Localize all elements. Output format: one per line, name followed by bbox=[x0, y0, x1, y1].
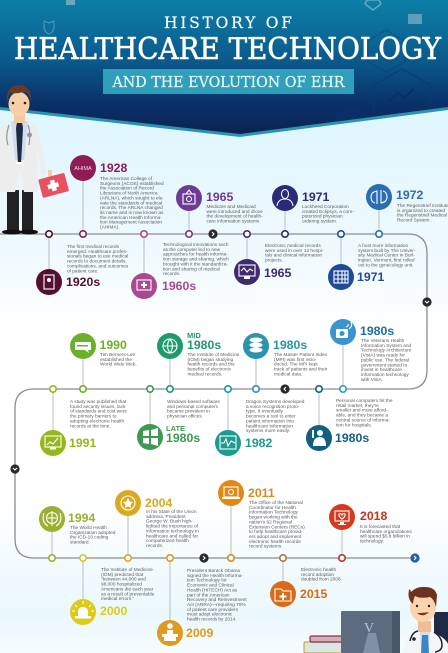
event: 2011: electronic health records bbox=[249, 539, 301, 545]
subtitle band bbox=[103, 69, 354, 94]
event: 2009: President Barack Obama bbox=[187, 568, 240, 574]
event: 2011: 2011 bbox=[248, 486, 275, 500]
event: 2000: medical errors." bbox=[101, 596, 134, 602]
event: late 1980s: became prevalent in bbox=[167, 409, 210, 415]
event: 2004: In his State of the Union bbox=[146, 509, 197, 515]
event: 1980s VistA: (VistA) was ready for bbox=[361, 353, 405, 359]
title: HISTORY OF bbox=[164, 14, 292, 32]
subtitle band: AND THE EVOLUTION OF EHR bbox=[112, 73, 345, 91]
event: 2000: The Institute of Medicine bbox=[101, 567, 153, 573]
event: 2009: of patient care providers bbox=[187, 607, 239, 613]
event: 1965 lower: projects. bbox=[265, 258, 283, 264]
event: 1982: 1982 bbox=[245, 436, 273, 450]
event: 2011: Coordinator for Health bbox=[249, 505, 296, 511]
event: 2004: 2004 bbox=[145, 496, 173, 510]
event: 2015: record adoption bbox=[301, 572, 334, 578]
event: 2009: Recovery and Reinvestment bbox=[187, 597, 247, 603]
event: 2004: George W. Bush high- bbox=[146, 519, 193, 525]
event: 1994: Organization adopted bbox=[70, 530, 116, 536]
event: 1971 lower: 1971 bbox=[357, 270, 385, 284]
doctor illustration bottom right bbox=[403, 587, 448, 653]
event: 2004: computerized health bbox=[146, 538, 189, 544]
event: 1980s master patient index: 1980s bbox=[273, 338, 307, 352]
event: 1928: The American College of bbox=[100, 176, 153, 182]
event: mid 1980s: 1980s bbox=[187, 338, 221, 352]
event: 1991: records at the time. bbox=[70, 423, 111, 429]
event: 1971 upper: 1971 bbox=[302, 190, 330, 204]
event: 1982: a voice recognition proto- bbox=[246, 404, 300, 410]
event: 1994: The World Health bbox=[70, 525, 107, 531]
event: 1928: (ARLNA), which sought to ele- bbox=[100, 195, 164, 201]
event: 1928: records. The ARLNA changed bbox=[100, 205, 163, 211]
event: late 1980s: 1980s bbox=[166, 431, 200, 445]
event: 1960s: Technological innovations such bbox=[163, 242, 229, 248]
event: 1971 lower: A host more information bbox=[358, 243, 409, 249]
event: mid 1980s: health records and the bbox=[188, 362, 235, 368]
event: 2009: part of the American bbox=[187, 592, 230, 598]
event: 1928: the American Health Informa- bbox=[100, 215, 162, 221]
event: 1982: systems more easily. bbox=[246, 428, 290, 434]
event: 1980s VistA: information technology bbox=[361, 372, 409, 378]
event: 1928: Librarians of North America bbox=[100, 191, 158, 197]
event: mid 1980s: MID bbox=[187, 331, 201, 340]
event: 1971 upper: ordering system. bbox=[302, 219, 337, 225]
event: 1920s: emerged. Healthcare profes- bbox=[67, 249, 128, 255]
event: 1971 upper: Lockheed Corporation bbox=[302, 204, 349, 210]
event: 1990 bbox=[70, 333, 137, 392]
event: 2011: nation's 62 Regional bbox=[249, 519, 292, 525]
event: late 1980s bbox=[137, 386, 220, 450]
event: 2011: The Office of the National bbox=[249, 500, 303, 506]
event: 1980s master patient index: track of patients and their bbox=[274, 367, 328, 373]
event: 2011: began working with the bbox=[249, 515, 298, 521]
event: 2009: Health (HITECH) Act as bbox=[187, 587, 238, 593]
computer monitor: V bbox=[364, 621, 374, 636]
event: 1990: established the bbox=[100, 357, 132, 363]
event: 1982: type. It eventually bbox=[246, 409, 284, 415]
event: 1971 lower: ington, Vermont, first rolled bbox=[358, 258, 415, 264]
event: 2011: ers adopt and implement bbox=[249, 534, 302, 540]
event: 1972 bbox=[366, 184, 448, 237]
event: 1994: 1994 bbox=[68, 511, 96, 525]
event: 2000: Americans die each year bbox=[101, 586, 154, 592]
event: 1972: the Regenstrief Medical bbox=[397, 213, 447, 219]
event: 1991: of standards and cost were bbox=[70, 409, 127, 415]
event: 1991: A study was published that bbox=[70, 399, 127, 405]
event: 1994 bbox=[39, 506, 116, 561]
event: 1965 upper: the development of health- bbox=[206, 214, 263, 220]
event: 2011: record systems. bbox=[249, 544, 283, 550]
event: 2015: 2015 bbox=[300, 587, 328, 601]
event: 1982 bbox=[215, 386, 305, 456]
event: 1960s: tion storage and sharing, which bbox=[163, 257, 229, 263]
event: 1991: adopting electronic health bbox=[70, 418, 124, 424]
event: 2004: information technology in bbox=[146, 528, 199, 534]
event: 1972: The Regenstrief Institute bbox=[397, 203, 448, 209]
event: mid 1980s: medical records. bbox=[188, 371, 222, 377]
doctor illustration left bbox=[0, 85, 52, 234]
event: 2000: "between 44,000 and bbox=[101, 577, 146, 583]
event: 1972: is organized to created bbox=[397, 208, 445, 214]
event: 2000: as a result of preventable bbox=[101, 591, 155, 597]
event: 2018: healthcare organizations bbox=[360, 529, 412, 535]
event: 2000: (IOM) predicted that bbox=[101, 572, 144, 578]
event: 1980s VistA bbox=[330, 319, 412, 392]
event: mid 1980s: benefits of electronic bbox=[188, 367, 232, 373]
event: 1928: 1928 bbox=[100, 161, 128, 175]
event: 1920s bbox=[36, 231, 129, 295]
event: 2004: healthcare and called for bbox=[146, 533, 198, 539]
event: 1960s: as the computer led to new bbox=[163, 247, 221, 253]
event: 1991 bbox=[40, 386, 127, 456]
event: 1928: (AHIMA). bbox=[100, 224, 120, 230]
event: 1928 bbox=[70, 155, 164, 237]
event: 2004 bbox=[115, 490, 199, 561]
event: 2004: lighted the importance of bbox=[146, 524, 199, 530]
event: 1965 upper: care information systems bbox=[206, 219, 260, 225]
event: 2018 bbox=[329, 504, 412, 561]
event: 1928: vate the standards of medical bbox=[100, 200, 162, 206]
event: 1972: 1972 bbox=[396, 188, 424, 202]
event: 1928: its name and is now known as bbox=[100, 210, 164, 216]
event: 1920s: 1920s bbox=[66, 275, 100, 289]
event: 2000: 98,000 hospitalized bbox=[101, 582, 142, 588]
event: 2015 bbox=[270, 555, 342, 607]
event: 1971 lower: sity Medical Center in Burl- bbox=[358, 253, 415, 259]
event: 2009: signed the Health Informa- bbox=[187, 573, 243, 579]
event: late 1980s: and personal computers bbox=[167, 404, 219, 410]
event: 2018: technology. bbox=[360, 539, 384, 545]
event: late 1980s: physician offices. bbox=[167, 414, 203, 420]
event: 2011: to help healthcare provid- bbox=[249, 529, 303, 535]
event: 1980s VistA: Technology Architecture bbox=[361, 348, 412, 354]
event: 1980s master patient index: (MPI) was first intro- bbox=[274, 357, 317, 363]
event: 1960s: tion and sharing of medical bbox=[163, 266, 220, 272]
event: 1991: 1991 bbox=[69, 436, 97, 450]
event: 1980s VistA: with VistA. bbox=[361, 377, 383, 383]
event: 2011: Extension Centers (RECs) bbox=[249, 524, 305, 530]
event: 1980s personal computers: retail market, they're bbox=[336, 403, 379, 409]
event: 2009: tion Technology for bbox=[187, 578, 227, 584]
event: late 1980s: LATE bbox=[166, 424, 185, 433]
event: late 1980s: Windows-based software bbox=[167, 399, 220, 405]
event: 2018: It is forecasted that bbox=[360, 524, 401, 530]
event: 2004: address, President bbox=[146, 514, 186, 520]
event: 1980s master patient index: medical data. bbox=[274, 371, 302, 377]
event: 1980s personal computers: central source of informa- bbox=[336, 417, 390, 423]
event: 2009: Economic and Clinical bbox=[187, 583, 234, 589]
event: 1965 lower: 1965 bbox=[264, 266, 292, 280]
event: 1971 lower bbox=[328, 231, 416, 290]
event: 1982: becomes a tool to enter bbox=[246, 414, 296, 420]
event: 1982: healthcare information bbox=[246, 423, 293, 429]
event: 1982: Dragon Systems developed bbox=[246, 399, 305, 405]
event: 1980s personal computers: Personal computers hit the bbox=[336, 398, 393, 404]
event: 2018: will spend $5.8 billion in bbox=[360, 534, 410, 540]
event: 1991: found security issues, lack bbox=[70, 404, 126, 410]
event: 1928: tion Management Association bbox=[100, 220, 162, 226]
event: 1980s VistA: invest in healthcare bbox=[361, 367, 402, 373]
event: 1971 upper: puterized physician bbox=[302, 214, 343, 220]
event: 2009 bbox=[157, 555, 247, 646]
event: 2000: 2000 bbox=[100, 604, 128, 618]
event: 2004: records. bbox=[146, 543, 163, 549]
event: 1980s VistA: 1980s bbox=[360, 324, 394, 338]
event: 1965 upper: Medicare and Medicaid bbox=[206, 204, 256, 210]
event: 1980s master patient index: duced. The MPI kept bbox=[274, 362, 318, 368]
event: 1980s personal computers: 1980s bbox=[335, 431, 369, 445]
event: 1980s VistA: Information System and bbox=[361, 343, 412, 349]
event: 1980s personal computers: smaller and more afford- bbox=[336, 408, 388, 414]
event: mid 1980s: (IOM) began studying bbox=[188, 357, 234, 363]
event: 2000 bbox=[70, 555, 155, 625]
event: 1990: World Wide Web. bbox=[100, 362, 137, 368]
event: 1980s personal computers: able, and they became a bbox=[336, 413, 388, 419]
books bbox=[304, 636, 344, 653]
event: 2011: Information Technology bbox=[249, 510, 299, 516]
event: 1920s: The first medical records bbox=[67, 244, 120, 250]
event: 1990: 1990 bbox=[100, 338, 127, 352]
event: 2009: health records by 2014. bbox=[187, 616, 237, 622]
title bbox=[14, 14, 442, 67]
event: 1972: Record System. bbox=[397, 218, 431, 224]
event: 2009: Act (ARRA)—requiring 70% bbox=[187, 602, 246, 608]
event: 1971 upper bbox=[272, 185, 354, 237]
event: 2009: must adopt electronic bbox=[187, 612, 233, 618]
event: 1971 lower: out to the gynecology unit. bbox=[358, 262, 413, 268]
header banner bbox=[0, 0, 448, 137]
event: 1980s VistA: government started to bbox=[361, 362, 408, 368]
event: 1994: standard. bbox=[70, 540, 90, 546]
event: 2009: 2009 bbox=[186, 626, 214, 640]
event: 1965 lower: were used in over 12 hospi- bbox=[265, 248, 324, 254]
event: 1920s: of patient care. bbox=[67, 268, 98, 274]
event: 1980s master patient index: The Master Patient Index bbox=[274, 352, 328, 358]
event: 1980s personal computers: tion for hospitals. bbox=[336, 422, 372, 428]
event: 1971 upper: created Eclipsys, a com- bbox=[302, 209, 354, 215]
event: 1980s VistA: public use. The federal bbox=[361, 357, 409, 363]
event: 1960s: records. bbox=[163, 271, 180, 277]
event: 1965 lower: tals and clinical information bbox=[265, 253, 322, 259]
event: 1982: patient information into bbox=[246, 418, 294, 424]
event: 1965 upper: 1965 bbox=[206, 190, 234, 204]
event: 1928: Surgeons (ACOS) established bbox=[100, 181, 164, 187]
event: 1960s: approaches for health informa- bbox=[163, 252, 228, 258]
event: 2015: doubled from 2008. bbox=[301, 577, 342, 583]
event: 1928: the Association of Record bbox=[100, 186, 154, 192]
event: 1960s bbox=[131, 231, 229, 299]
event: 1920s: complications, and outcomes bbox=[67, 263, 129, 269]
event: 1920s: sionals began to use medical bbox=[67, 254, 128, 260]
event: 1965 lower bbox=[234, 231, 324, 285]
event: 1965 lower: Electronic medical records bbox=[265, 243, 321, 249]
event: 1990: Tim Berners-Lee bbox=[100, 352, 136, 358]
event: 1971 lower: system built by The Univer- bbox=[358, 248, 416, 254]
event: 1991: the primary barriers to bbox=[70, 414, 117, 420]
event: 1965 upper bbox=[176, 185, 263, 237]
event: 1960s: brought with it the standardiza- bbox=[163, 261, 228, 267]
timeline path bbox=[0, 229, 432, 563]
event: mid 1980s bbox=[157, 331, 240, 392]
event: 1960s: 1960s bbox=[162, 279, 196, 293]
event: 1980s personal computers bbox=[306, 386, 393, 451]
event: 2015: Electronic health bbox=[301, 567, 336, 573]
event: 2018: 2018 bbox=[360, 509, 388, 523]
event: 2011 bbox=[218, 480, 305, 561]
computer monitor bbox=[341, 611, 400, 653]
event: 1928: AHIMA bbox=[74, 166, 92, 172]
event: 1920s: records to document details, bbox=[67, 259, 127, 265]
event: 1965 upper: were introduced and drove bbox=[206, 209, 263, 215]
event: 1980s master patient index bbox=[243, 333, 328, 392]
icon: first aid bag bbox=[38, 173, 69, 198]
event: mid 1980s: The Institute of Medicine bbox=[188, 352, 240, 358]
event: 1994: the ICD-10 coding bbox=[70, 535, 109, 541]
event: 1980s VistA: The Veterans Health bbox=[361, 338, 405, 344]
